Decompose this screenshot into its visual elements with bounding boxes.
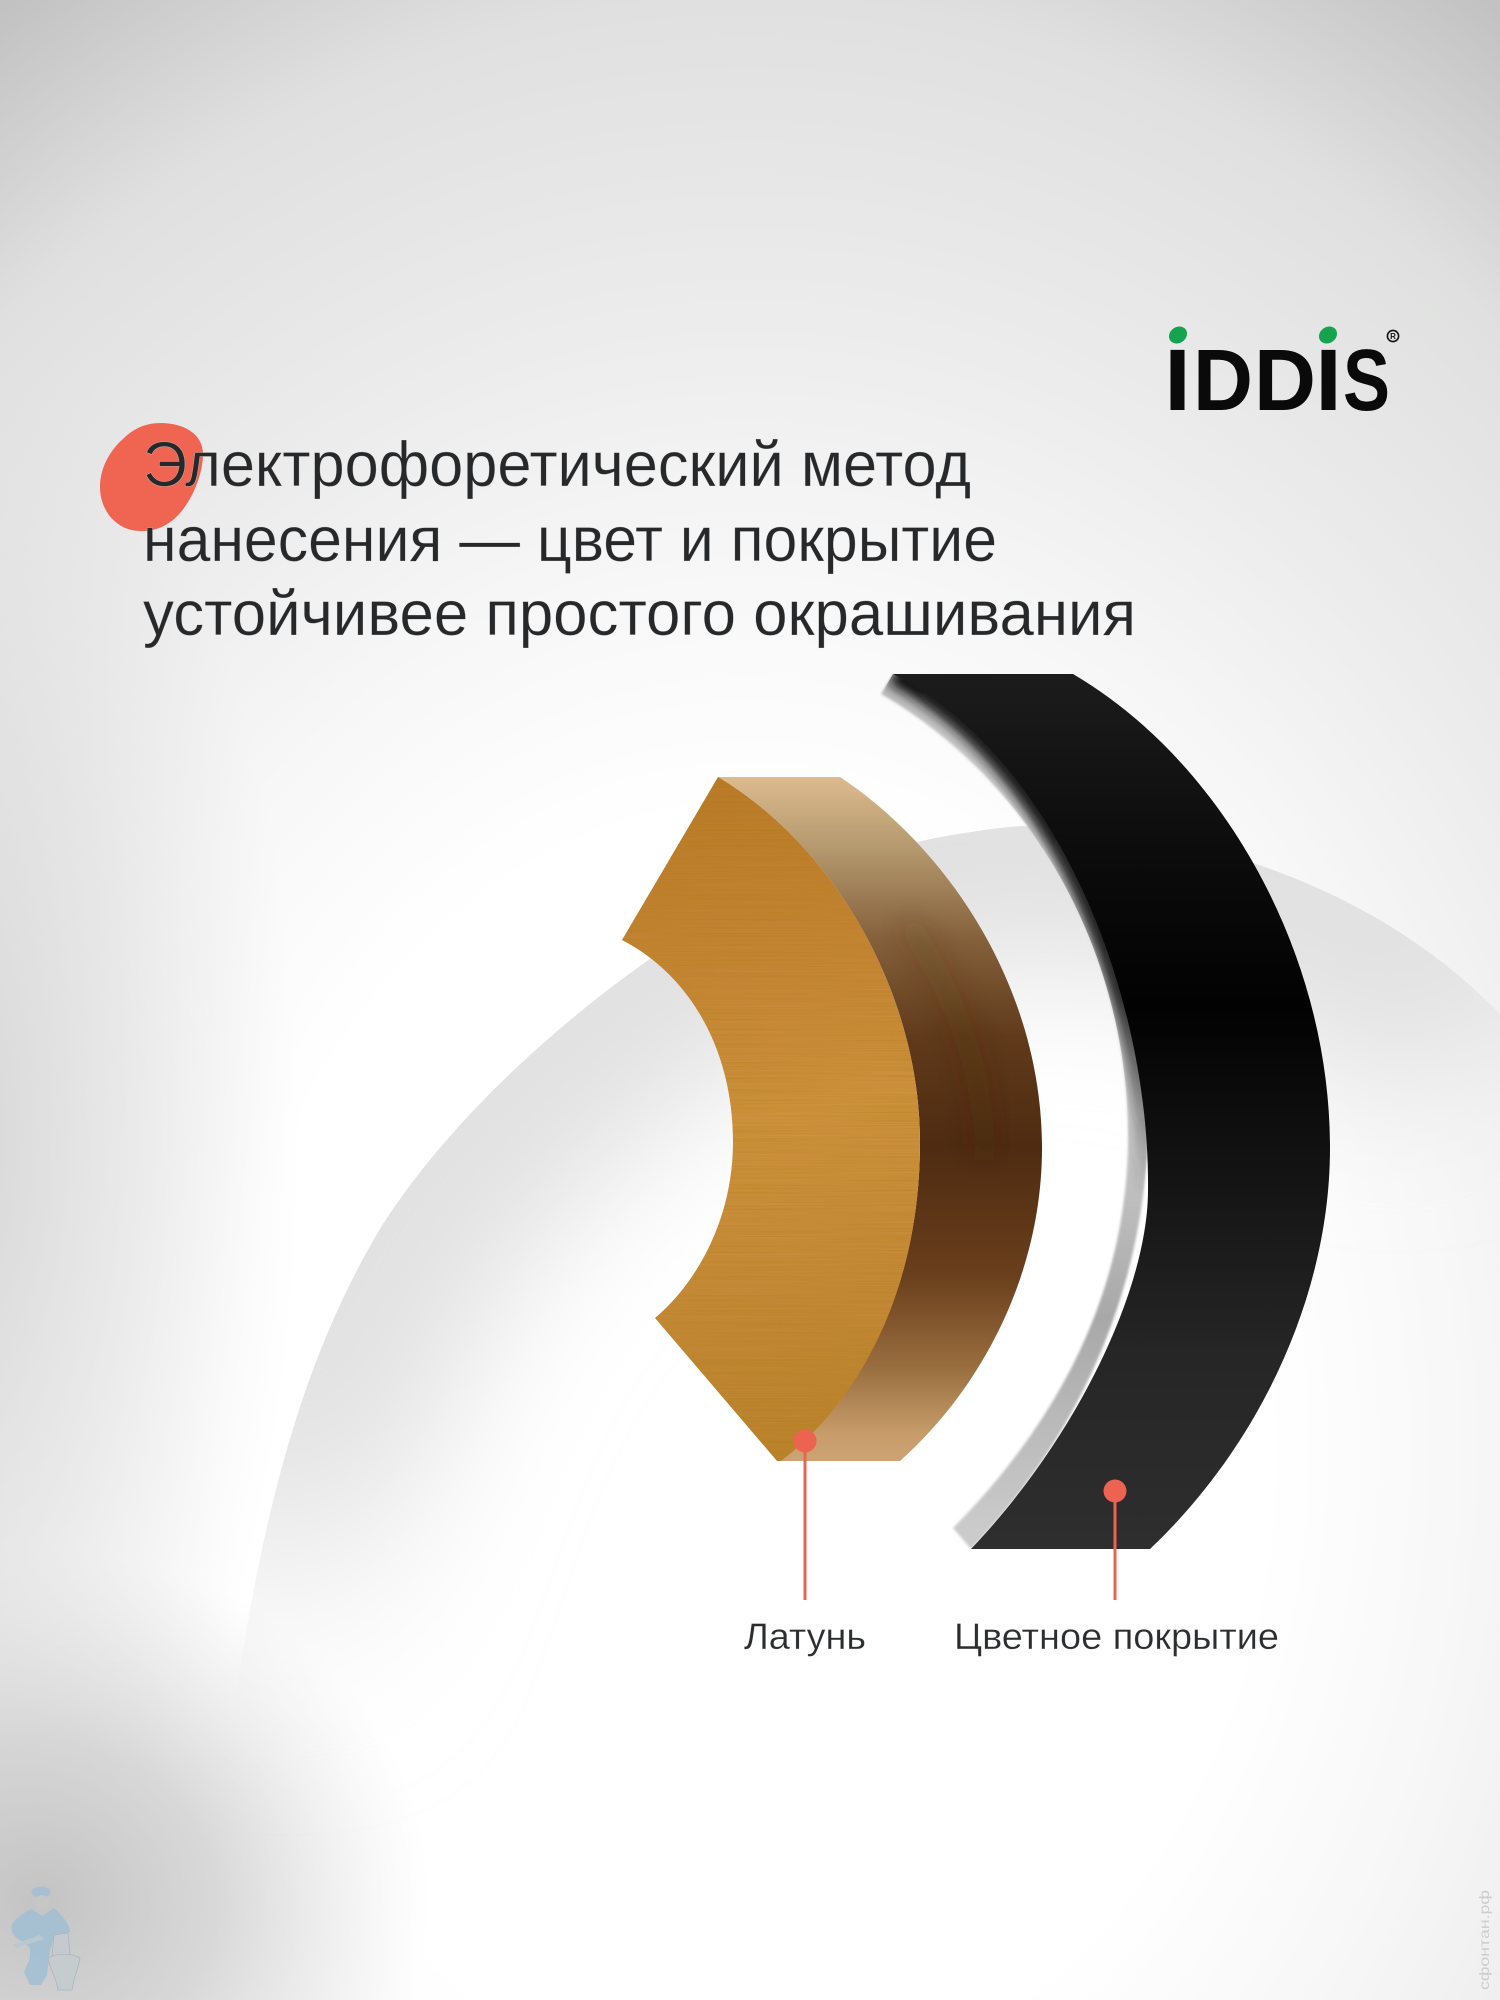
callout: brass (744, 1430, 866, 1657)
logo wordmark: I (1164, 332, 1191, 429)
logo green dots (1166, 323, 1340, 347)
site watermark: сфонтан.рф (1476, 1890, 1492, 1990)
callout: coating (954, 1480, 1279, 1657)
logo registered mark (1387, 330, 1399, 342)
brass front face (620, 775, 922, 1463)
brass segment (620, 775, 1042, 1463)
coral blob accent (100, 423, 203, 531)
title: Электрофоретический метод (143, 430, 971, 500)
logo wordmark: I (1315, 332, 1342, 429)
title: нанесения — цвет и покрытие (143, 505, 997, 575)
callout: coating: Цветное покрытие (954, 1616, 1279, 1657)
title (143, 430, 1136, 649)
icon: iddis logo (1164, 323, 1399, 429)
logo wordmark: S (1343, 332, 1390, 429)
logo wordmark (1164, 332, 1390, 429)
title: устойчивее простого окрашивания (143, 579, 1136, 649)
icon: plumber watermark (12, 1886, 80, 1990)
coating black body (893, 674, 1330, 1549)
toilet (48, 1933, 80, 1990)
logo wordmark: D (1254, 332, 1316, 429)
plumber figure (12, 1886, 70, 1985)
coating segment (881, 674, 1330, 1549)
logo wordmark: D (1193, 332, 1253, 429)
brass side wall (718, 777, 1042, 1461)
background swoosh (250, 826, 1497, 1613)
callout: brass: Латунь (744, 1616, 866, 1657)
logo registered mark: R (1390, 332, 1396, 341)
coating inner rim (881, 674, 1148, 1549)
